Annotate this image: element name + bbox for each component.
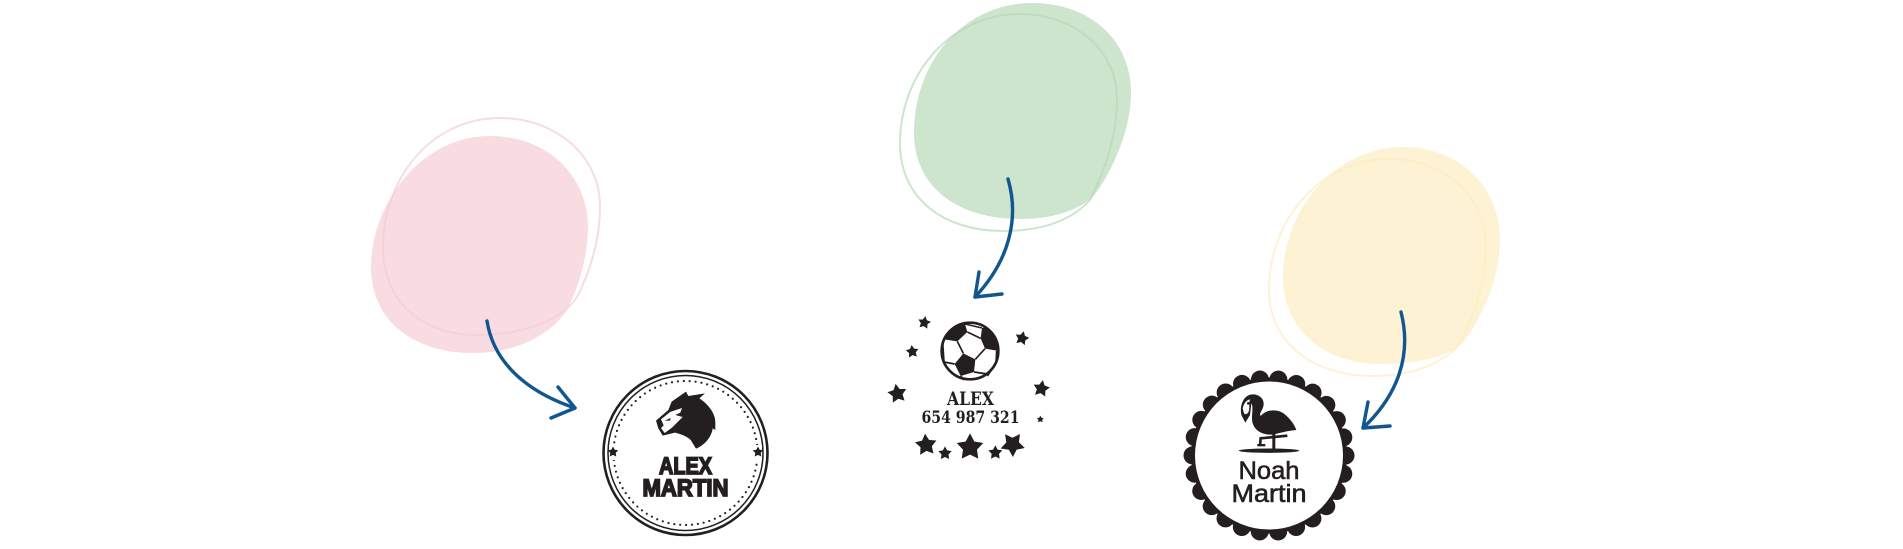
panel: lion stamp group (371, 118, 768, 535)
flamingo stamp (1191, 378, 1347, 534)
star left (608, 446, 618, 456)
yellow blob outline (1269, 159, 1486, 376)
panel: flamingo stamp group (1191, 147, 1500, 534)
white gaps behind side stars (609, 445, 617, 460)
surname text: Martin (1232, 480, 1306, 508)
pink blob outline (383, 118, 600, 335)
green blob outline (900, 14, 1117, 231)
phone number text: 654 987 321 (922, 408, 1020, 428)
name text: ALEX (659, 453, 712, 480)
pink blob (371, 136, 588, 353)
arrow: yellow blob to flamingo stamp (1363, 312, 1405, 428)
arrow: pink blob to lion stamp (487, 321, 575, 418)
panel: football stamp group (886, 3, 1131, 460)
name text: ALEX (946, 389, 995, 410)
stamp rings (604, 371, 768, 535)
icon: lion head (656, 392, 715, 449)
yellow blob (1283, 147, 1500, 364)
star right (753, 446, 763, 456)
first name text: Noah (1238, 457, 1300, 485)
icon: flamingo (1239, 394, 1299, 453)
surname text: MARTIN (642, 475, 728, 502)
arrow: green blob to football stamp (975, 179, 1013, 297)
icon: football (942, 323, 999, 380)
stars around the football (886, 315, 1051, 460)
football stamp (886, 315, 1051, 460)
scalloped border (1191, 378, 1347, 534)
green blob (914, 3, 1131, 219)
lion stamp (604, 371, 768, 535)
